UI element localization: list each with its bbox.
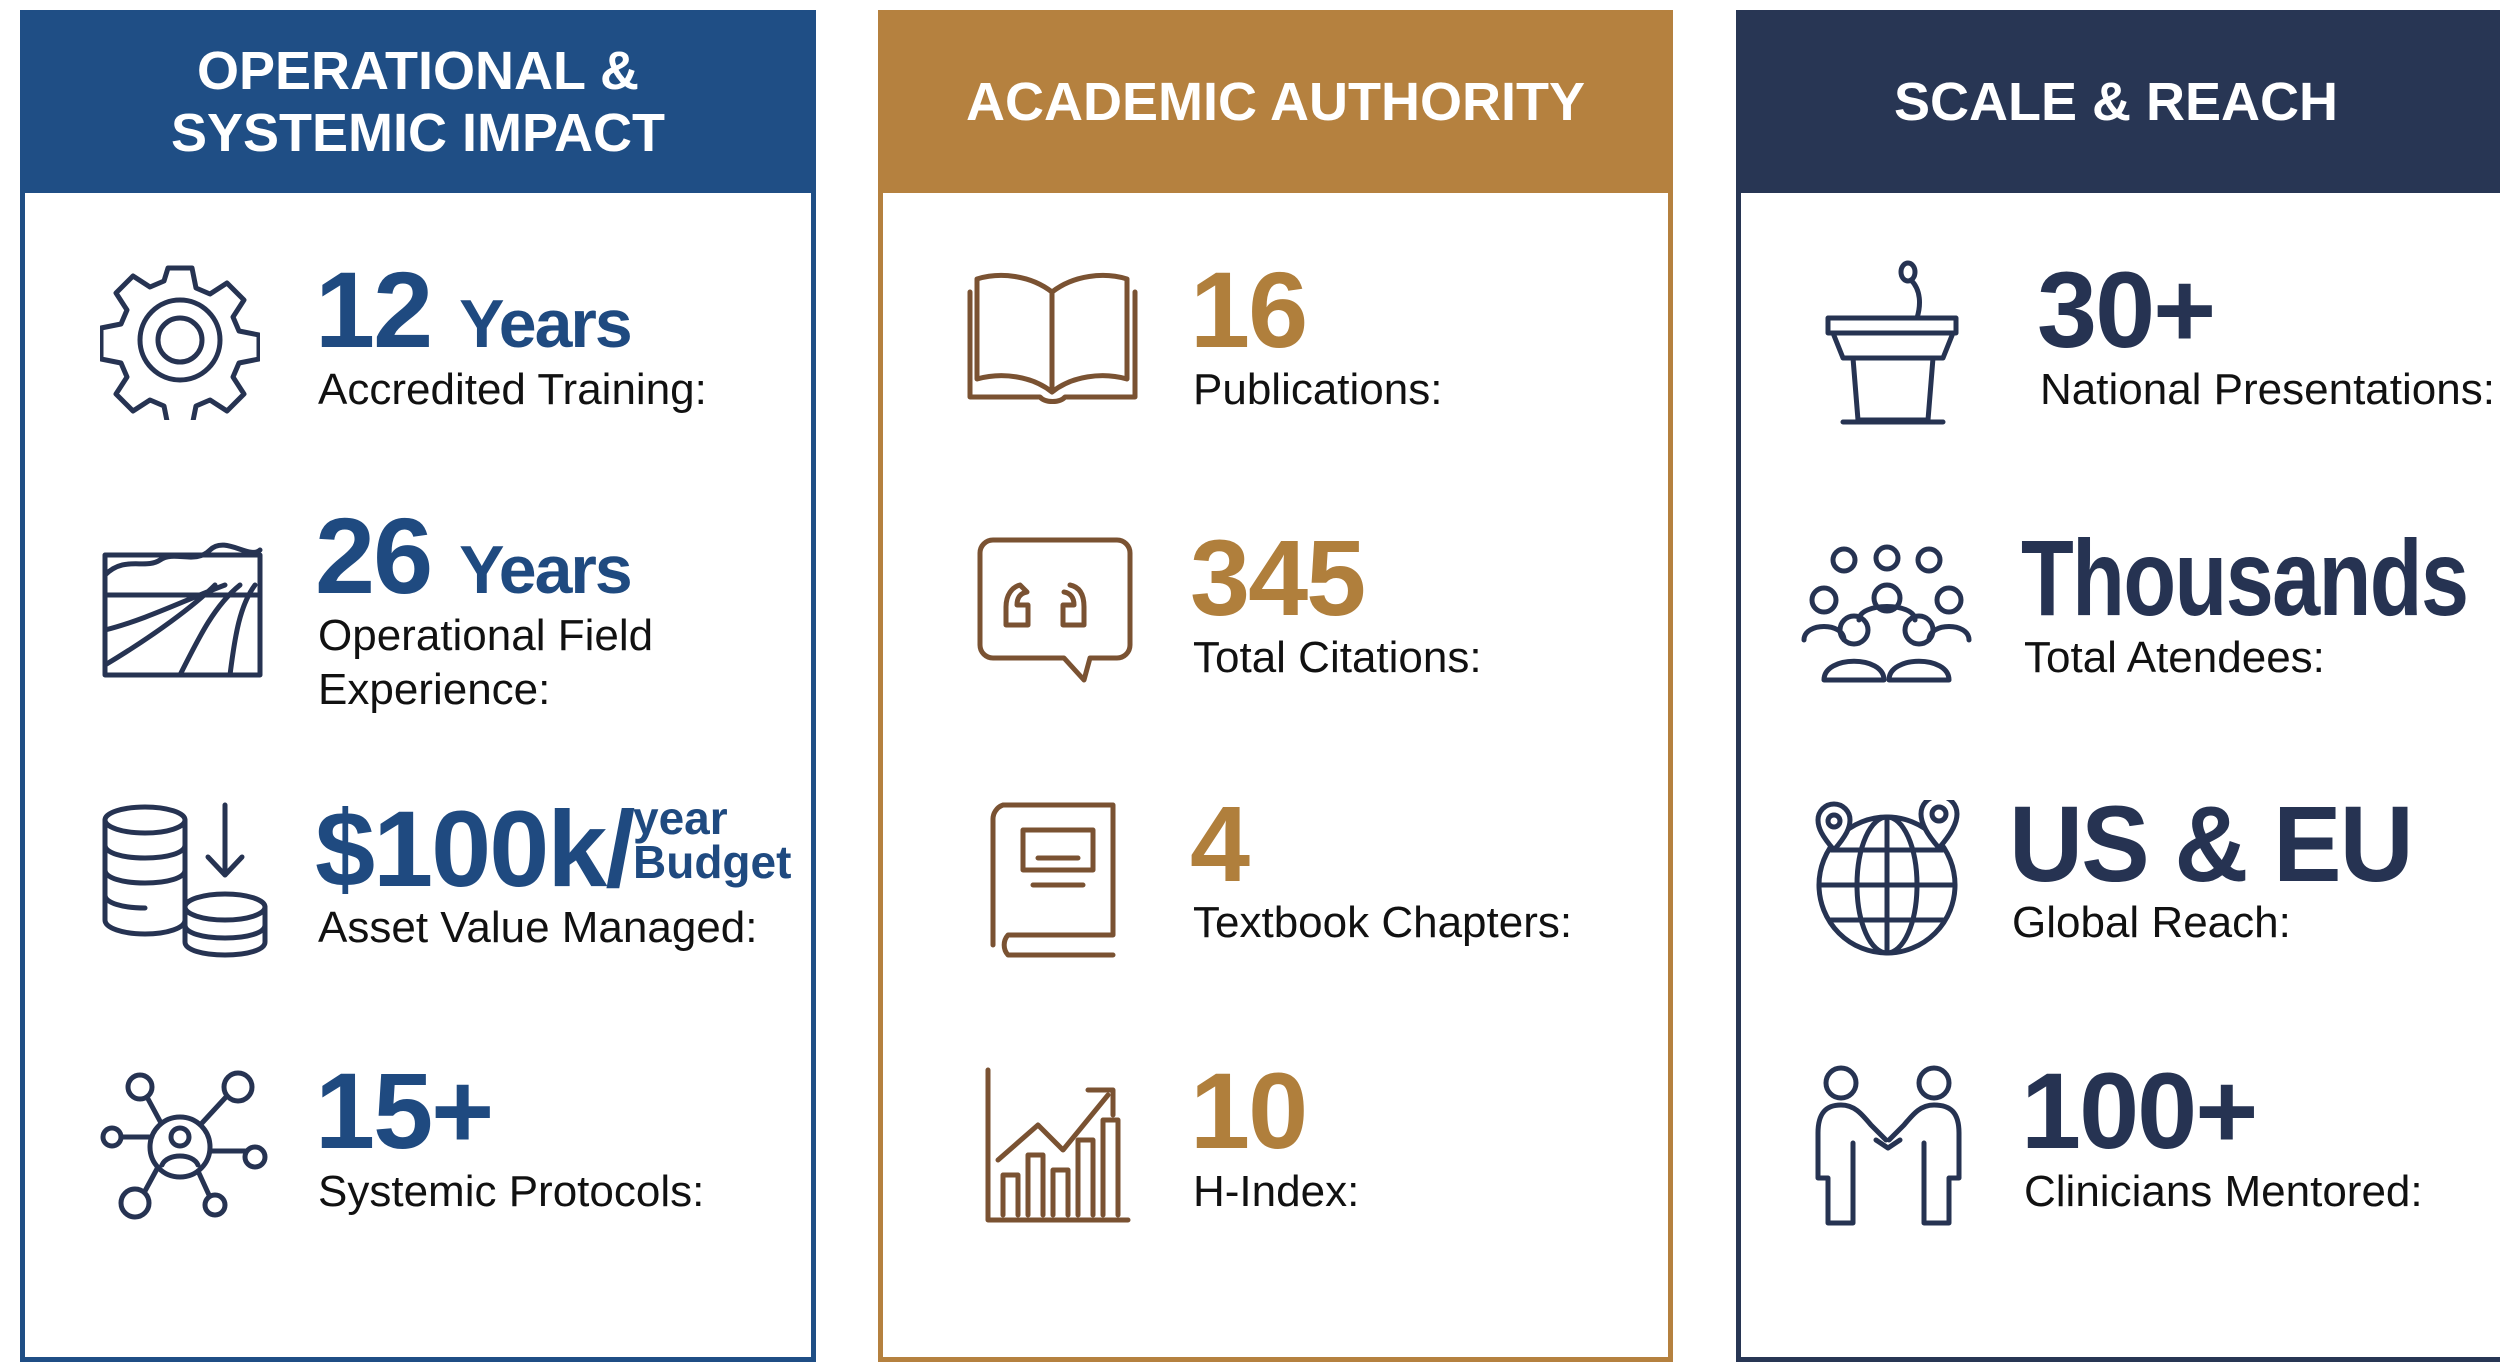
stat: 26 years: 26 Years [315, 495, 631, 616]
label: asset value managed: Asset Value Managed: [318, 903, 757, 952]
label: clinicians mentored: Clinicians Mentored: [2024, 1167, 2423, 1216]
stat: 15+: 15+ [315, 1050, 492, 1171]
stat: 100k budget: $100k/ [315, 788, 633, 909]
stat: 100+: 100+ [2021, 1050, 2256, 1171]
panel: academic authority [878, 10, 1673, 1362]
icon: network [100, 1070, 268, 1220]
icon: coins [102, 802, 268, 958]
label: total citations: Total Citations: [1193, 633, 1482, 682]
icon: quote bubble [978, 538, 1132, 682]
stat: 100k budget [315, 788, 791, 909]
icon: handshake [1816, 1066, 1962, 1226]
panel: operational & systemic impact [20, 10, 816, 1362]
label: accredited training: Accredited Training: [318, 365, 707, 414]
heading: scale & reach [1736, 10, 2500, 193]
label: operational field experience: Operational Field [318, 611, 653, 660]
label: operational field experience: Experience: [318, 665, 550, 714]
panel: scale & reach [1736, 10, 2500, 1362]
icon: crowd [1802, 544, 1972, 682]
icon: gear [100, 266, 260, 420]
panel: operational & systemic impact: Budget [633, 836, 791, 888]
label: total attendees: Total Atendees: [2024, 633, 2325, 682]
icon: field [102, 542, 262, 678]
icon: textbook [990, 802, 1116, 958]
stat: 10: 10 [1190, 1050, 1306, 1171]
label: h-index: H-Index: [1193, 1167, 1359, 1216]
label: publications: Publications: [1193, 365, 1442, 414]
icon: bar chart [986, 1068, 1130, 1222]
stat: us & eu: US & EU [2009, 783, 2412, 904]
heading: operational [20, 10, 816, 193]
stat: 4: 4 [1190, 783, 1248, 904]
icon: podium [1826, 260, 1958, 424]
label: operational field experience [318, 611, 653, 714]
heading: academic authority [878, 10, 1673, 193]
icon: open book [968, 272, 1138, 404]
stat: 345: 345 [1190, 517, 1364, 638]
icon: globe with pins [1816, 800, 1960, 956]
stat: 30+: 30+ [2037, 249, 2214, 370]
stat: thousands: Thousands [2021, 517, 2467, 638]
heading: operational: OPERATIONAL & [197, 40, 639, 100]
label: national presentations: National Presentations: [2040, 365, 2495, 414]
label: global reach: Global Reach: [2012, 898, 2291, 947]
heading: operational: SYSTEMIC IMPACT [171, 102, 665, 162]
stat: 16: 16 [1190, 249, 1306, 370]
stat: 12 years: 12 Years [315, 249, 631, 370]
label: textbook chapters: Textbook Chapters: [1193, 898, 1572, 947]
label: systemic protocols: Systemic Protocols: [318, 1167, 704, 1216]
heading: academic authority: ACADEMIC AUTHORITY [966, 72, 1585, 132]
panel: operational & systemic impact: year [633, 792, 728, 844]
heading: scale & reach: SCALE & REACH [1894, 72, 2338, 132]
